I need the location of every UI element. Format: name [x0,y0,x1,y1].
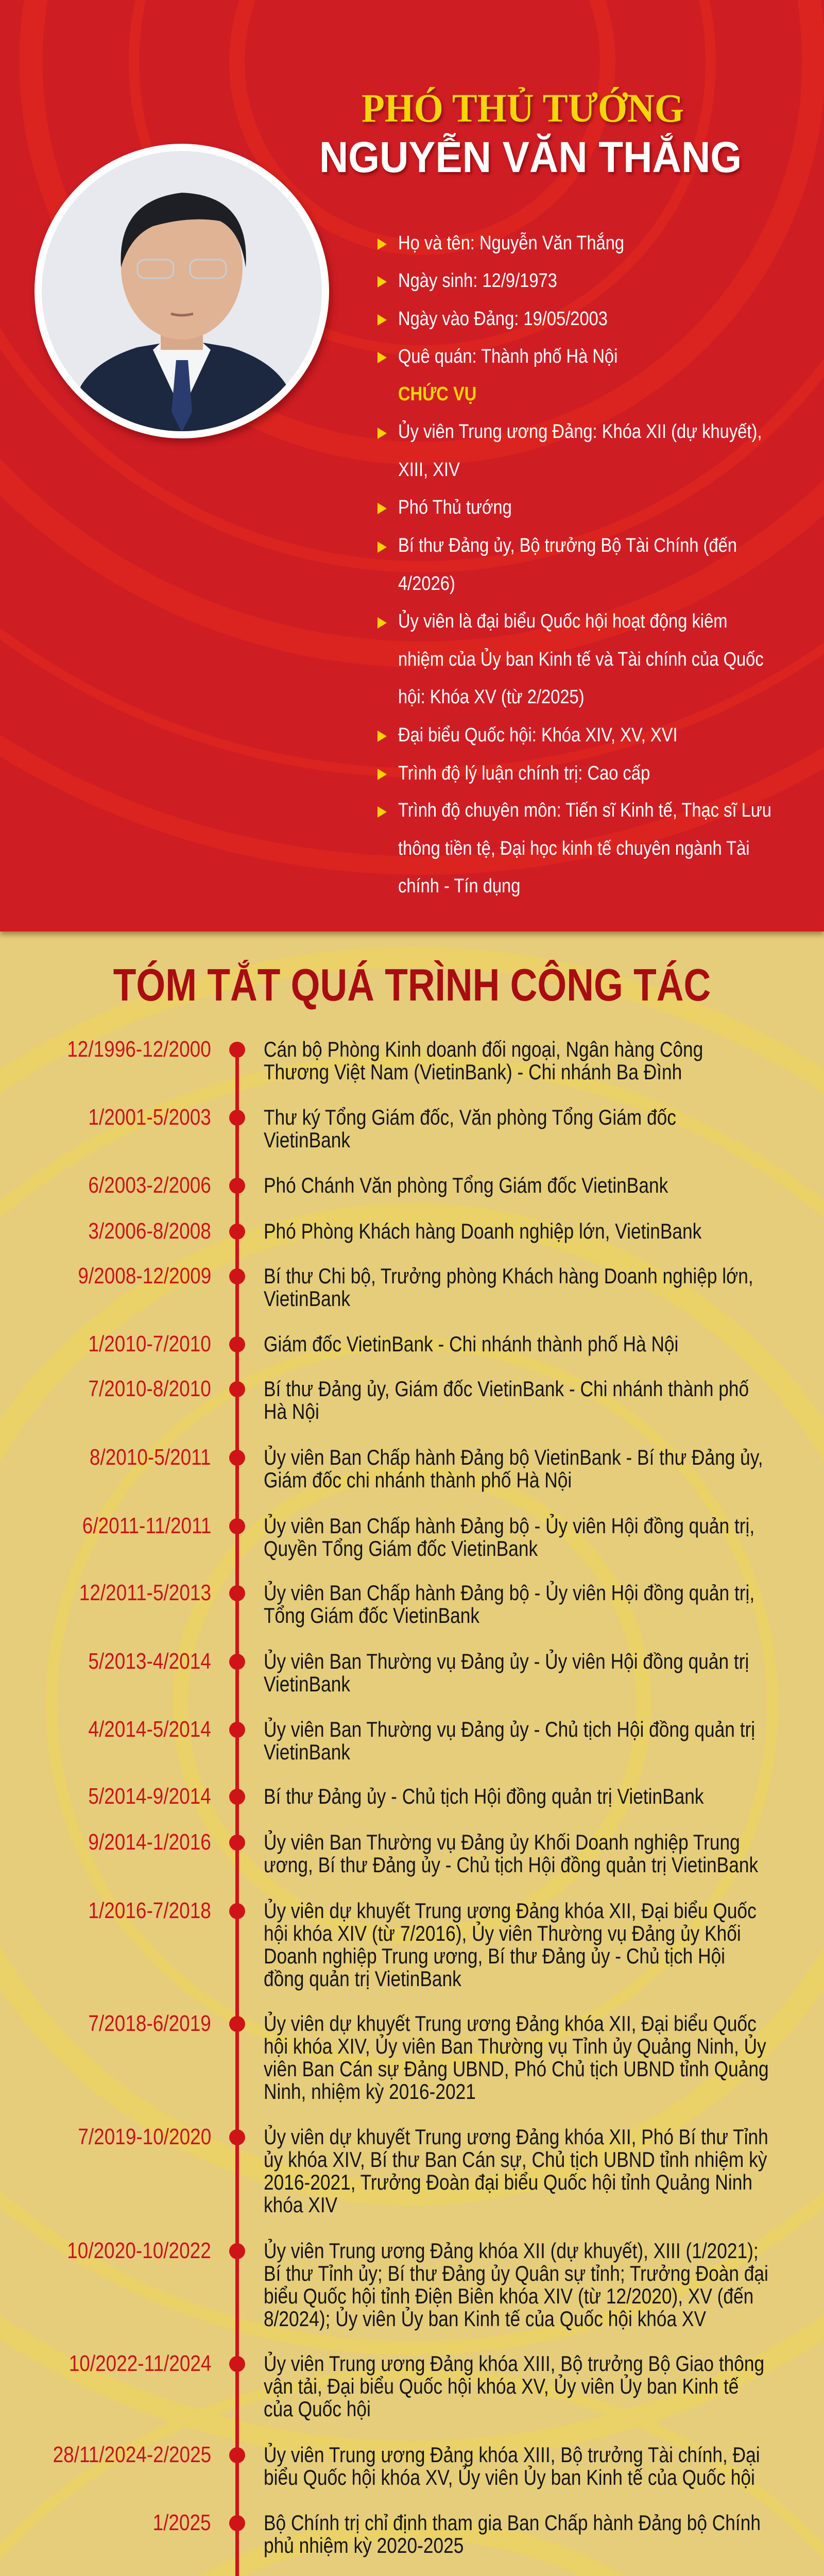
entry 18: Bí thư Tỉnh ủy; Bí thư Đảng ủy Quân sự tỉnh; Trưởng Đoàn đại [264,2261,768,2285]
icon: bullet arrow [377,352,387,363]
entry 19: 10/2022-11/2024 [68,2351,211,2376]
entry 21: Bộ Chính trị chỉ định tham gia Ban Chấp hành Đảng bộ Chính [264,2511,761,2535]
title: Phó Thủ tướng: PHÓ THỦ TƯỚNG [362,86,684,130]
entry 9 [82,1513,754,1561]
entry 15 [89,1898,757,1991]
info: birth: Ngày sinh: 12/9/1973 [398,270,557,292]
icon: bullet arrow [377,731,387,742]
entry 2: 1/2001-5/2003 [89,1105,211,1130]
entry 13: Bí thư Đảng ủy - Chủ tịch Hội đồng quản trị VietinBank [264,1784,703,1808]
entry 8 [90,1445,763,1492]
entry 21 [153,2510,761,2557]
info: position 1: Ủy viên Trung ương Đảng: Khóa XII (dự khuyết), [398,421,762,443]
entry 8: 8/2010-5/2011 [90,1445,211,1470]
entry 8: Ủy viên Ban Chấp hành Đảng bộ VietinBank - Bí thư Đảng ủy, [264,1445,763,1469]
entry 2: VietinBank [264,1128,350,1152]
entry 6: 1/2010-7/2010 [89,1331,211,1357]
entry 15: Ủy viên dự khuyết Trung ương Đảng khóa XII, Đại biểu Quốc [264,1899,757,1923]
entry 2 [89,1105,676,1152]
timeline axis line [235,1046,239,2576]
entry 19: Ủy viên Trung ương Đảng khóa XIII, Bộ trưởng Bộ Giao thông [264,2351,764,2376]
heading: chức vụ: CHỨC VỤ [398,383,476,405]
entry 6: Giám đốc VietinBank - Chi nhánh thành phố Hà Nội [264,1332,678,1356]
icon: bullet arrow [377,276,387,287]
info: name: Họ và tên: Nguyễn Văn Thắng [398,232,624,254]
entry 12: 4/2014-5/2014 [89,1717,211,1742]
info: party: Ngày vào Đảng: 19/05/2003 [398,308,608,330]
entry 20: Ủy viên Trung ương Đảng khóa XIII, Bộ trưởng Tài chính, Đại [264,2443,760,2467]
entry 15: Doanh nghiệp Trung ương, Bí thư Đảng ủy - Chủ tịch Hội [264,1944,725,1968]
info: position 4: nhiệm của Ủy ban Kinh tế và Tài chính của Quốc [398,648,764,670]
info: expertise: thông tiền tệ, Đại học kinh tế chuyên ngành Tài [398,838,750,859]
entry 9: Quyền Tổng Giám đốc VietinBank [264,1536,538,1561]
entry 1: Thương Việt Nam (VietinBank) - Chi nhánh Ba Đình [264,1060,682,1084]
entry 21: 1/2025 [153,2510,211,2535]
icon: bullet arrow [377,239,387,250]
entry 13: 5/2014-9/2014 [89,1784,211,1809]
entry 4 [89,1218,701,1244]
entry 10: Tổng Giám đốc VietinBank [264,1603,479,1628]
photo: portrait [35,144,329,438]
entry 18 [67,2238,768,2331]
entry 1: 12/1996-12/2000 [67,1037,211,1062]
entry 21: phủ nhiệm kỳ 2020-2025 [264,2533,464,2557]
info: expertise: Trình độ chuyên môn: Tiến sĩ Kinh tế, Thạc sĩ Lưu [398,800,771,821]
info: position 1: XIII, XIV [398,459,460,480]
entry 17: Ủy viên dự khuyết Trung ương Đảng khóa XII, Phó Bí thư Tỉnh [264,2125,768,2149]
entry 16: Ủy viên dự khuyết Trung ương Đảng khóa XII, Đại biểu Quốc [264,2011,757,2036]
info: position 3: Bí thư Đảng ủy, Bộ trưởng Bộ Tài Chính (đến [398,535,737,556]
entry 10 [79,1580,754,1628]
entry 10: 12/2011-5/2013 [79,1580,211,1605]
entry 3: 6/2003-2/2006 [89,1173,211,1198]
entry 2: Thư ký Tổng Giám đốc, Văn phòng Tổng Giám đốc [264,1105,676,1129]
entry 14: Ủy viên Ban Thường vụ Đảng ủy Khối Doanh nghiệp Trung [264,1830,740,1854]
entry 16: hội khóa XIV, Ủy viên Ban Thường vụ Tỉnh ủy Quảng Ninh, Ủy [264,2034,766,2058]
entry 7 [89,1376,749,1423]
entry 17: 7/2019-10/2020 [78,2124,211,2149]
entry 16 [89,2011,769,2104]
entry 17 [78,2124,768,2217]
heading: timeline title: TÓM TẮT QUÁ TRÌNH CÔNG TÁC [113,959,711,1010]
entry 18: biểu Quốc hội tỉnh Điện Biên khóa XIV (từ 12/2020), XV (đến [264,2284,753,2308]
entry 4: Phó Phòng Khách hàng Doanh nghiệp lớn, VietinBank [264,1219,701,1243]
entry 18: Ủy viên Trung ương Đảng khóa XII (dự khuyết), XIII (1/2021); [264,2239,759,2263]
entry 7: 7/2010-8/2010 [89,1376,211,1401]
icon: bullet arrow [377,806,387,818]
entry 14 [89,1829,758,1877]
icon: bullet arrow [377,314,387,326]
entry 16: Ninh, nhiệm kỳ 2016-2021 [264,2079,476,2104]
entry 1 [67,1037,703,1084]
entry 15: hội khóa XIV (từ 7/2016), Ủy viên Thường vụ Đảng ủy Khối [264,1921,741,1945]
info: position 4: Ủy viên là đại biểu Quốc hội hoạt động kiêm [398,611,727,632]
entry 20 [53,2442,760,2489]
entry 18: 10/2020-10/2022 [67,2238,211,2263]
entry 6 [89,1331,678,1357]
icon: bullet arrow [377,769,387,780]
icon: bullet arrow [377,617,387,629]
panel: red header background [0,0,824,931]
entry 12 [89,1717,755,1764]
entry 5 [78,1263,753,1311]
entry 9: Ủy viên Ban Chấp hành Đảng bộ - Ủy viên Hội đồng quản trị, [264,1514,754,1538]
info: position 3: 4/2026) [398,573,455,595]
entry 19: vận tải, Đại biểu Quốc hội khóa XV, Ủy viên Ủy ban Kinh tế [264,2374,739,2398]
entry 12: Ủy viên Ban Thường vụ Đảng ủy - Chủ tịch Hội đồng quản trị [264,1717,755,1741]
entry 5: VietinBank [264,1286,350,1311]
entry 12: VietinBank [264,1740,350,1764]
entry 7: Bí thư Đảng ủy, Giám đốc VietinBank - Chi nhánh thành phố [264,1377,749,1401]
info: expertise: chính - Tín dụng [398,875,520,897]
entry 3: Phó Chánh Văn phòng Tổng Giám đốc VietinBank [264,1173,668,1197]
icon: bullet arrow [377,541,387,553]
info: expertise [398,800,771,897]
info: position 4: hội: Khóa XV (từ 2/2025) [398,686,585,708]
entry 7: Hà Nội [264,1399,319,1423]
info: theory level: Trình độ lý luận chính trị: Cao cấp [398,762,650,784]
entry 15: đồng quản trị VietinBank [264,1967,461,1991]
entry 17: ủy khóa XIV, Bí thư Ban Cán sự, Chủ tịch UBND tỉnh nhiệm kỳ [264,2147,767,2172]
entry 16: viên Ban Cán sự Đảng UBND, Phó Chủ tịch UBND tỉnh Quảng [264,2057,769,2081]
info: position 3 [398,535,737,595]
entry 17: 2016-2021, Trưởng Đoàn đại biểu Quốc hội tỉnh Quảng Ninh [264,2170,752,2194]
entry 19: của Quốc hội [264,2397,371,2421]
info: position 4 [398,610,764,708]
panel: yellow timeline background pattern [0,947,824,2576]
entry 11: 5/2013-4/2014 [89,1649,211,1674]
entry 5: Bí thư Chi bộ, Trưởng phòng Khách hàng Doanh nghiệp lớn, [264,1264,753,1288]
icon: bullet arrow [377,503,387,514]
entry 17: khóa XIV [264,2193,337,2217]
entry 18: 8/2024); Ủy viên Ủy ban Kinh tế của Quốc hội khóa XV [264,2307,706,2331]
entry 20: biểu Quốc hội khóa XV, Ủy viên Ủy ban Kinh tế của Quốc hội [264,2465,755,2489]
entry 15: 1/2016-7/2018 [89,1898,211,1923]
entry 10: Ủy viên Ban Chấp hành Đảng bộ - Ủy viên Hội đồng quản trị, [264,1581,754,1605]
entry 11: Ủy viên Ban Thường vụ Đảng ủy - Ủy viên Hội đồng quản trị [264,1649,749,1673]
entry 5: 9/2008-12/2009 [78,1263,211,1289]
entry 19 [68,2351,764,2421]
entry 20: 28/11/2024-2/2025 [53,2442,211,2467]
entry 13 [89,1784,703,1809]
title: name: NGUYỄN VĂN THẮNG [319,133,742,181]
info: position 2: Phó Thủ tướng [398,497,512,518]
info: hometown: Quê quán: Thành phố Hà Nội [398,346,617,367]
entry 8: Giám đốc chi nhánh thành phố Hà Nội [264,1468,572,1492]
info: position 1 [398,420,762,480]
entry 11: VietinBank [264,1672,350,1696]
entry 1: Cán bộ Phòng Kinh doanh đối ngoại, Ngân hàng Công [264,1037,703,1061]
entry 14: 9/2014-1/2016 [89,1829,211,1855]
entry 11 [89,1649,749,1696]
icon: bullet arrow [377,428,387,439]
entry 9: 6/2011-11/2011 [82,1513,211,1538]
info: position 5: Đại biểu Quốc hội: Khóa XIV, XV, XVI [398,724,678,746]
entry 14: ương, Bí thư Đảng ủy - Chủ tịch Hội đồng quản trị VietinBank [264,1853,758,1877]
entry 16: 7/2018-6/2019 [89,2011,211,2036]
entry 3 [89,1173,668,1198]
entry 4: 3/2006-8/2008 [89,1218,211,1244]
